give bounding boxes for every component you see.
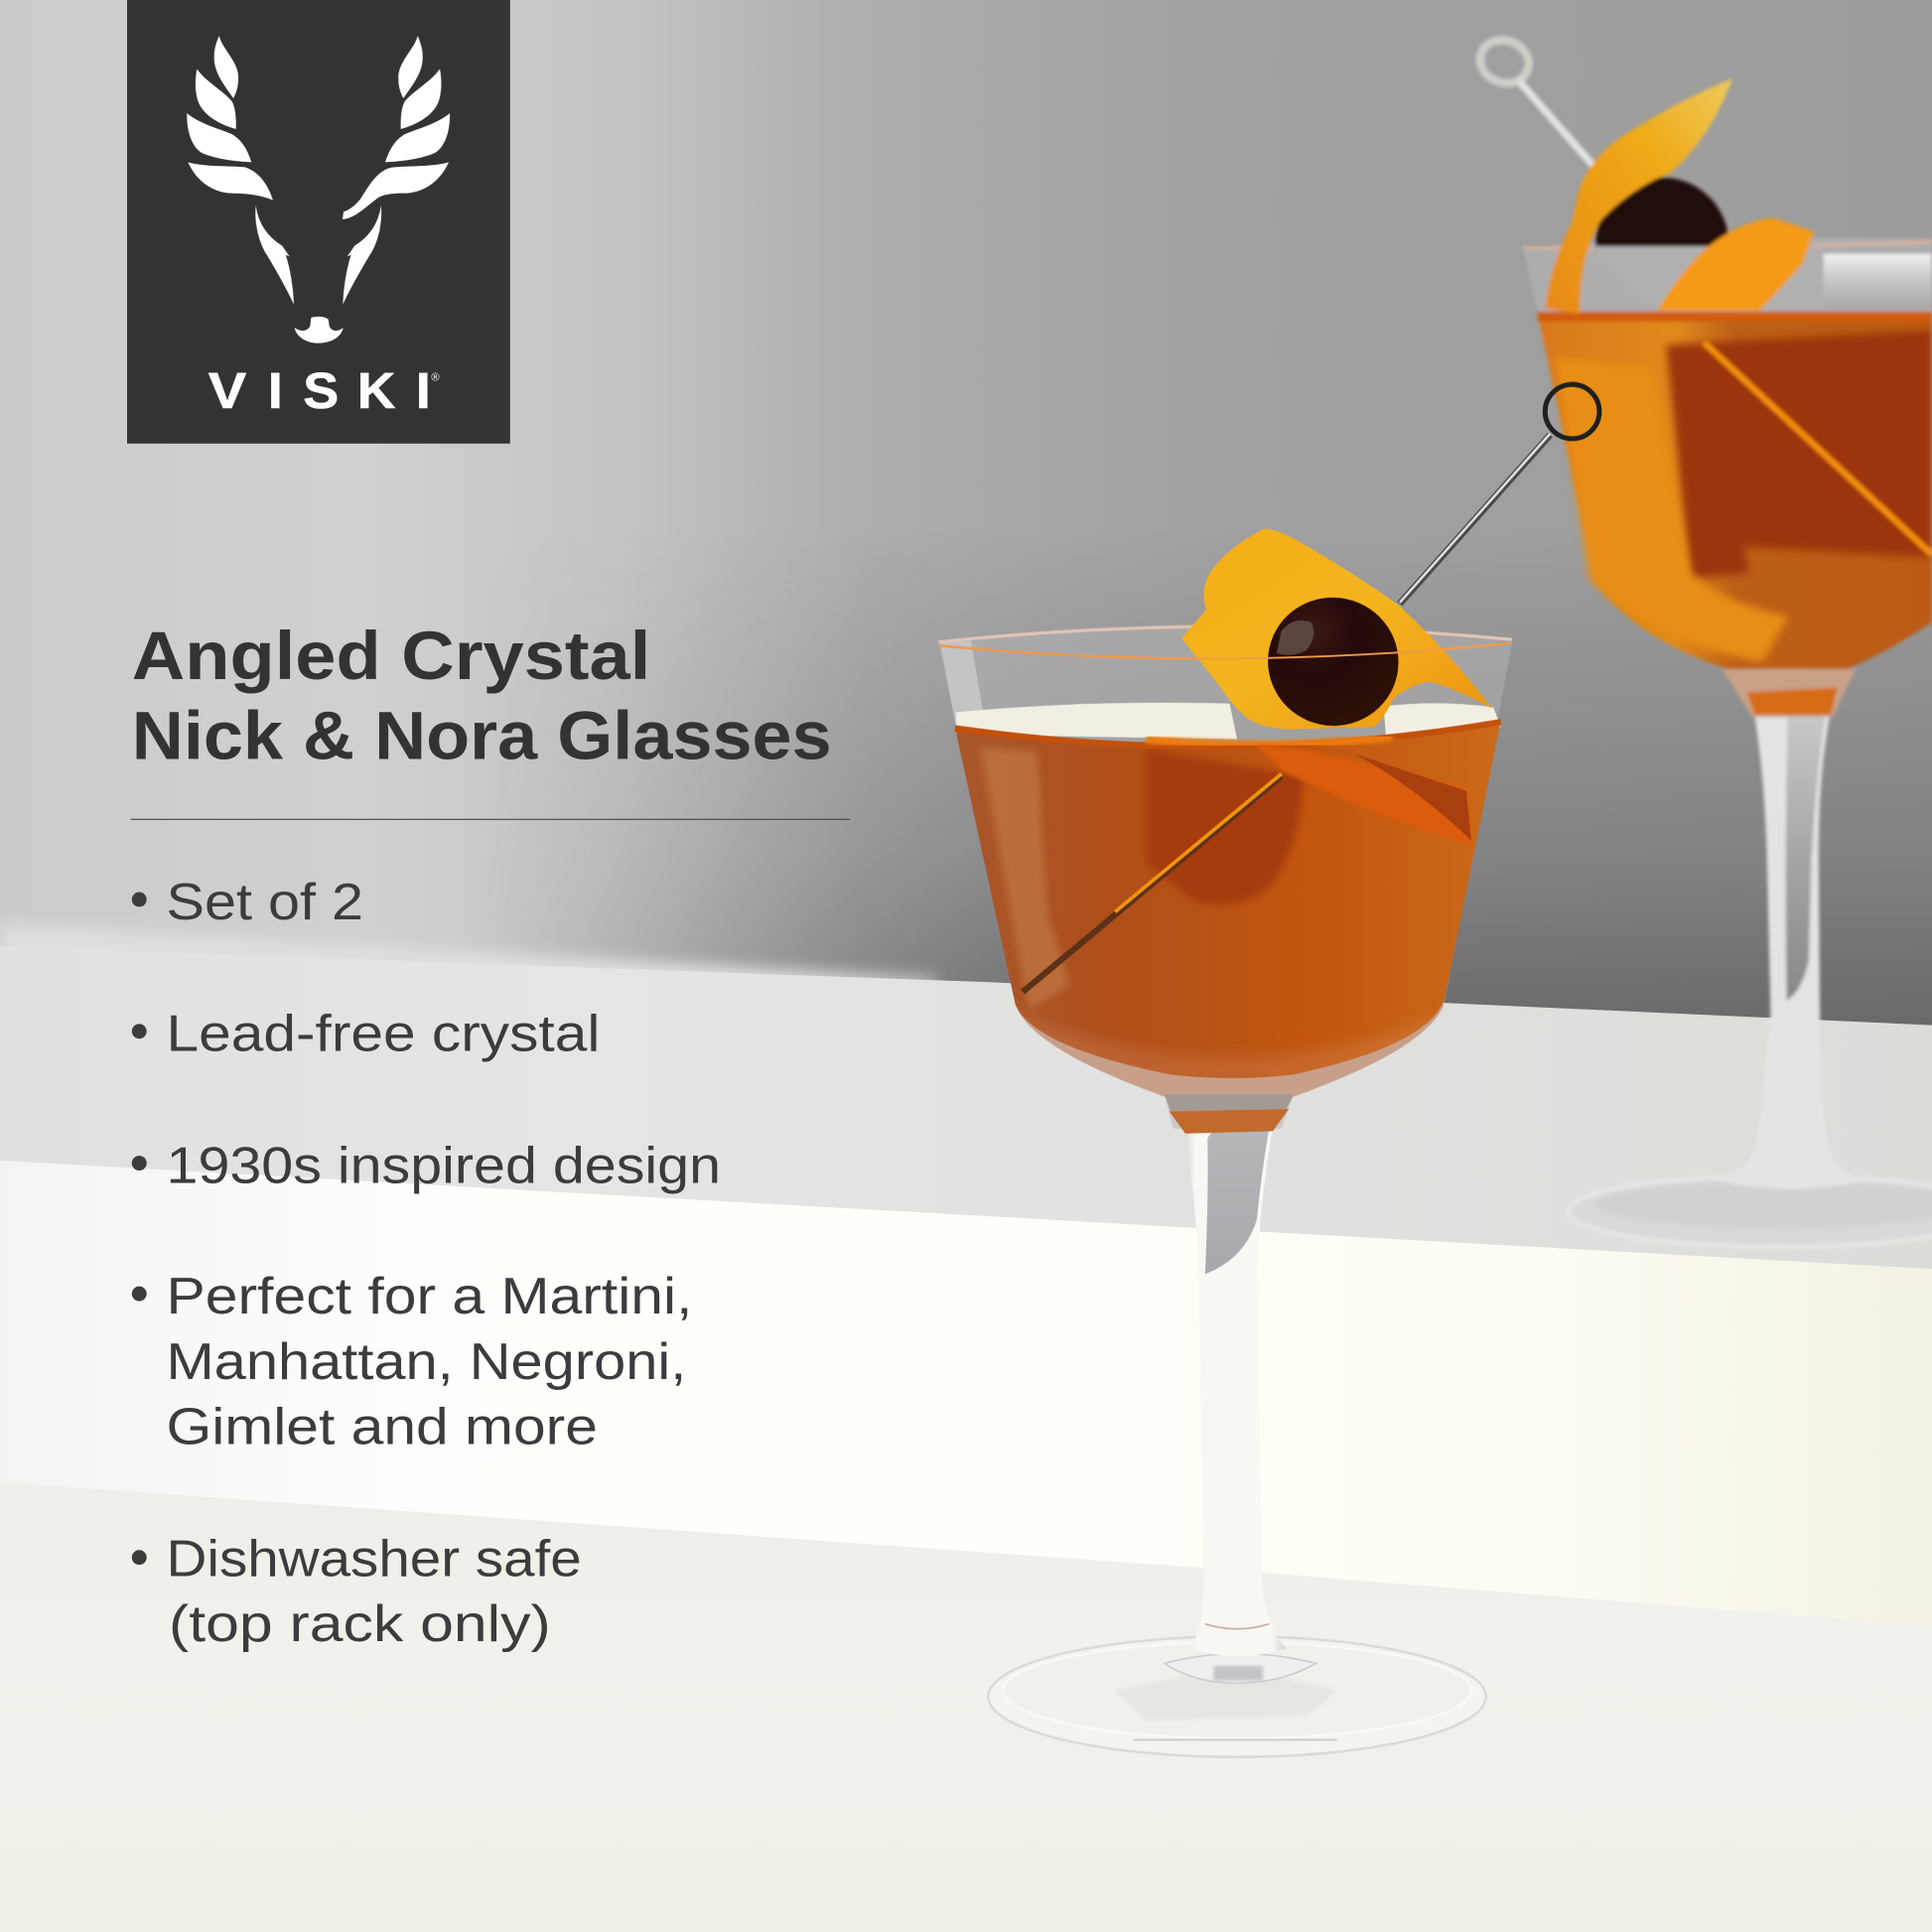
- back glass silver highlight: [1749, 254, 1932, 308]
- bullet: dishwasher safe: [132, 1530, 582, 1653]
- back glass liquid: [1538, 314, 1932, 669]
- front rim over garnish: [940, 643, 1511, 658]
- bullet: perfect for cocktails: Gimlet and more: [167, 1399, 598, 1456]
- glass rim highlight: [939, 626, 1512, 642]
- back glass lower reflection: [1555, 357, 1789, 661]
- front glass: [937, 528, 1513, 1757]
- bullet: 1930s inspired design: 1930s inspired design: [167, 1137, 721, 1194]
- meniscus bright band: [1146, 737, 1392, 745]
- logo mark: stag antlers and nose: [187, 36, 450, 344]
- front pick ring: [1545, 384, 1599, 439]
- left reflection band: [980, 747, 1069, 1011]
- back glass rim line: [1523, 241, 1932, 248]
- top surface soft edge: [0, 924, 936, 986]
- bottom light tone: [1021, 1012, 1435, 1078]
- neck amber band: [1170, 1109, 1289, 1134]
- back glass cherry: [1592, 175, 1729, 249]
- glass rim orange line: [940, 643, 1511, 658]
- back glass neck: [1722, 669, 1857, 717]
- submerged peel: [1257, 746, 1472, 845]
- top surface of step: [0, 946, 1932, 1269]
- back glass inner bowl gray: [1591, 246, 1824, 308]
- back glass pick reflection: [1704, 343, 1932, 554]
- liquid body: [955, 721, 1501, 1078]
- divider: [131, 818, 850, 820]
- cherry: [1256, 586, 1411, 738]
- title: Angled Crystal: [132, 619, 650, 694]
- back glass peel one: [1545, 78, 1732, 314]
- cherry shadow in liquid: [1146, 750, 1304, 904]
- background wall: [0, 0, 1932, 1047]
- feature list: [132, 874, 721, 1653]
- logo wordmark: S: [303, 362, 339, 419]
- bullet: perfect for cocktails: Manhattan, Negroni,: [167, 1333, 686, 1391]
- liquid tones: [979, 746, 1435, 1078]
- logo wordmark: I: [416, 362, 431, 419]
- title: Nick & Nora Glasses: [132, 699, 832, 774]
- registered mark: ®: [431, 371, 440, 383]
- submerged peel shadow: [1355, 755, 1471, 840]
- front pick upper stick: [1400, 434, 1550, 604]
- bullet: set of 2: Set of 2: [167, 874, 363, 931]
- front peel: [1181, 528, 1492, 730]
- liquid surface highlight left: [956, 703, 1237, 740]
- liquid meniscus: [955, 722, 1501, 747]
- submerged pick: [1023, 773, 1282, 992]
- logo wordmark: K: [357, 362, 396, 419]
- stem gray reflection: [1205, 1129, 1269, 1274]
- stem base ring: [1205, 1624, 1269, 1629]
- front glass foot: [988, 1636, 1486, 1757]
- bullet: lead-free crystal: Lead-free crystal: [167, 1006, 600, 1063]
- front glass stem: [1182, 1128, 1287, 1656]
- back glass stem gray reflection: [1786, 716, 1825, 1001]
- back glass neck amber band: [1747, 688, 1837, 715]
- floor surface: [0, 1482, 1932, 1932]
- bullet: perfect for cocktails: [132, 1268, 692, 1456]
- back glass: [1474, 34, 1932, 1247]
- logo panel: [127, 0, 510, 444]
- back glass stem: [1749, 716, 1834, 1160]
- back glass liquid surface: [1538, 312, 1932, 322]
- back glass bowl rim: [1523, 237, 1932, 323]
- glass bowl: [937, 624, 1513, 1129]
- wall lower shadow: [539, 610, 1932, 1026]
- glass left rim band: [940, 640, 986, 727]
- logo wordmark: V: [208, 362, 246, 419]
- bullet: dishwasher safe: Dishwasher safe: [167, 1530, 582, 1587]
- glass lower peach wall: [1016, 1004, 1445, 1097]
- bullet: dishwasher safe: (top rack only): [169, 1595, 551, 1653]
- bullet: perfect for cocktails: Perfect for a Martini,: [167, 1268, 692, 1325]
- neck clear glass: [1165, 1094, 1294, 1111]
- title: [132, 619, 832, 774]
- back glass pick: [1474, 34, 1599, 173]
- cherry highlight: [1277, 621, 1313, 655]
- front face of step: [0, 1161, 1932, 1626]
- back glass foot: [1569, 1160, 1932, 1247]
- logo wordmark: [208, 362, 431, 419]
- back glass peel two: [1657, 218, 1814, 311]
- logo wordmark: I: [268, 362, 283, 419]
- back glass dark core: [1666, 331, 1932, 579]
- liquid surface highlight right: [1384, 703, 1501, 742]
